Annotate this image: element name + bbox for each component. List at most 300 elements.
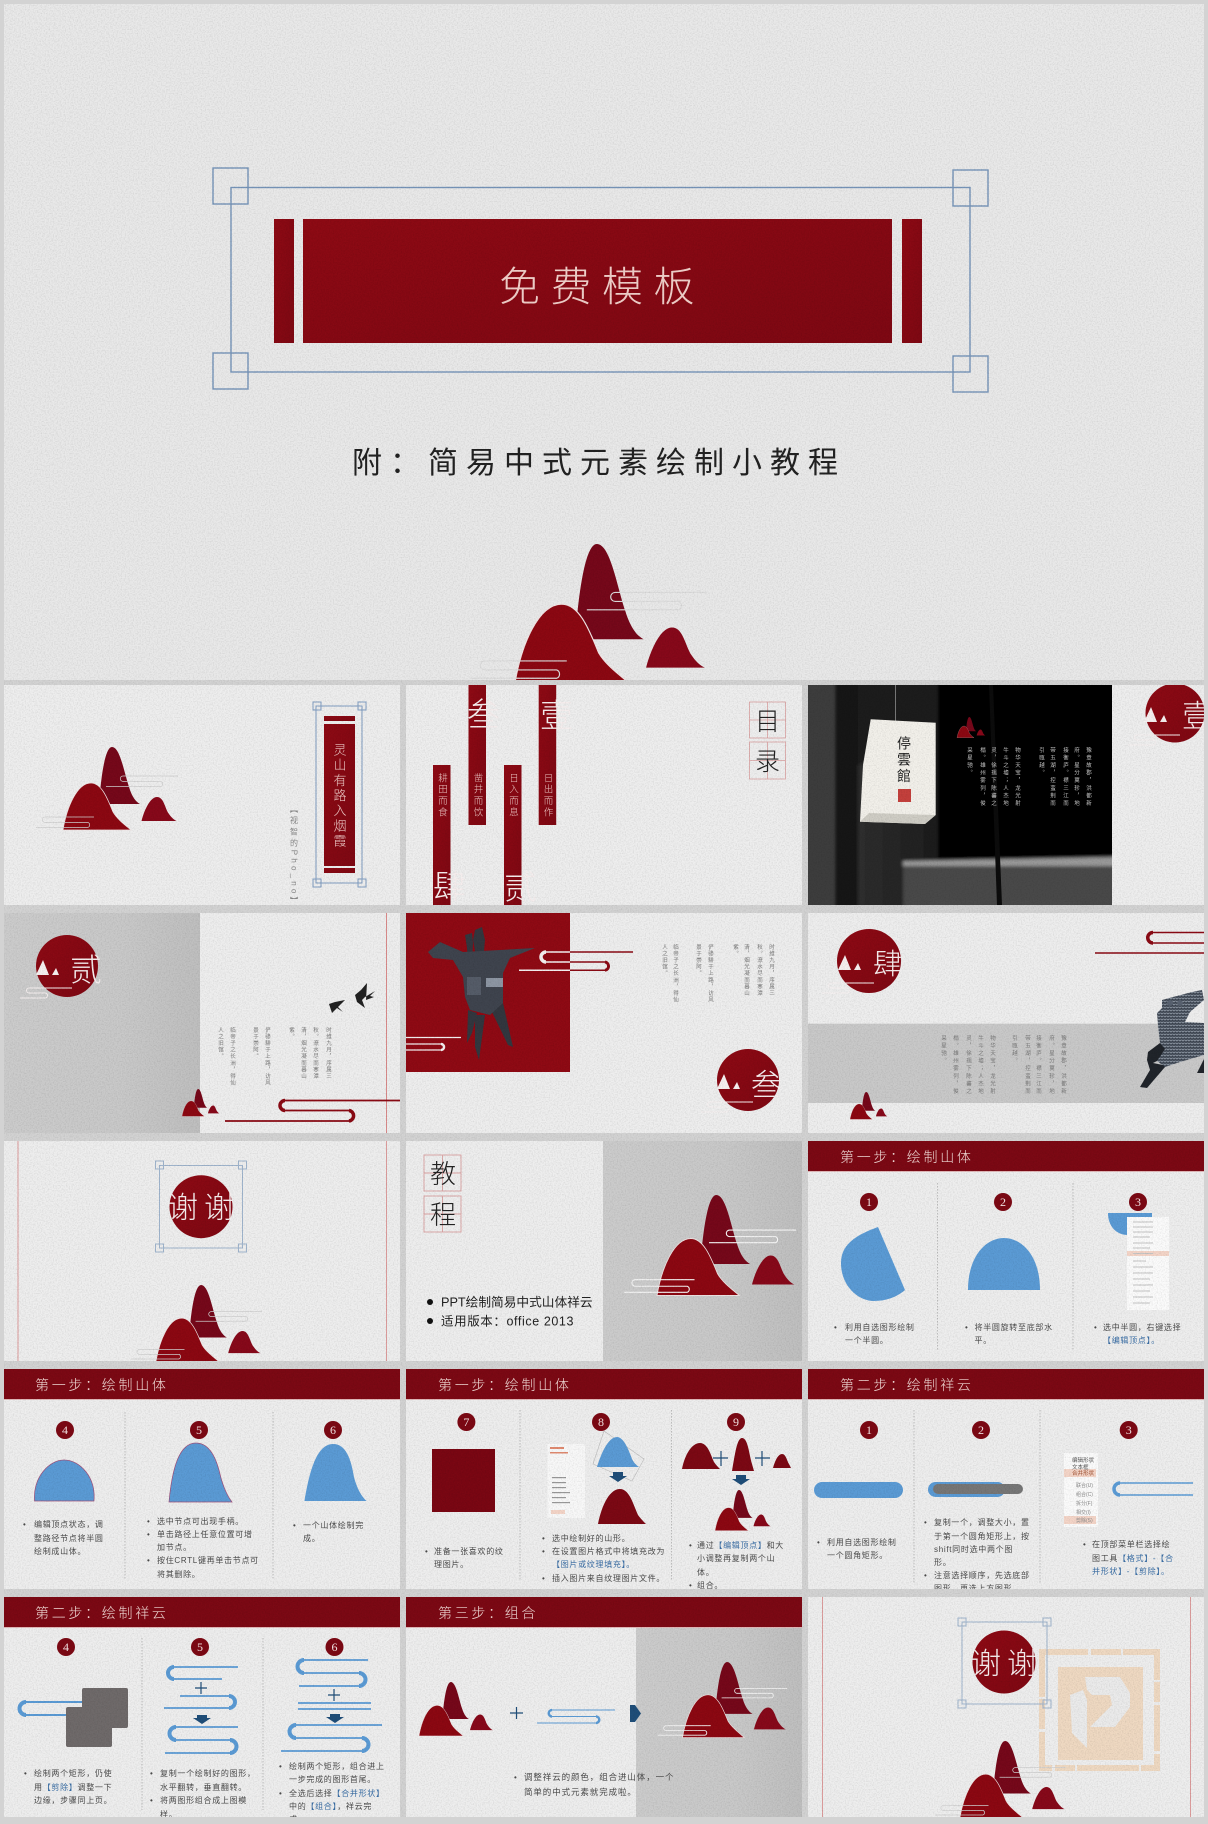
frame: [958, 1618, 1051, 1708]
caption 9: 小调整再复制两个山: [697, 1553, 775, 1563]
number 1: [860, 1421, 878, 1439]
vertical text: 带五湖，控蛮荆而: [1049, 747, 1056, 808]
caption 1: 利用自选图形绘制: [827, 1537, 897, 1547]
caption 5: 将其删除。: [157, 1569, 200, 1579]
caption 3: •: [1094, 1323, 1098, 1332]
vertical text: 时维九月，序属三: [325, 1026, 332, 1080]
heading: 教程: 程: [430, 1200, 456, 1230]
column: 贰: [504, 765, 537, 906]
vertical text: 榻。雄州雾列，俊: [952, 1034, 959, 1096]
caption 1: 利用自选图形绘制: [845, 1322, 915, 1332]
caption 3: 并形状】-【剪除】。: [1092, 1566, 1170, 1576]
mountain pieces: [682, 1438, 791, 1471]
caption 5: •: [150, 1769, 154, 1778]
number 4: [56, 1421, 74, 1439]
column: 贰: 日入而息: [507, 773, 519, 818]
caption 2: •: [924, 1571, 928, 1580]
watermark seal: [1042, 1652, 1157, 1768]
caption 6: 成。: [303, 1533, 320, 1543]
caption 9: [689, 1540, 784, 1590]
number 3: 3: [1135, 1195, 1141, 1209]
caption 8: 选中绘制好的山形。: [552, 1533, 630, 1543]
blue mountain in rotate frame: [593, 1431, 644, 1481]
number 1: 1: [866, 1423, 872, 1437]
caption 5: •: [150, 1796, 154, 1805]
dividers: [938, 1183, 1073, 1350]
grey band: [808, 1024, 1204, 1103]
caption 5: •: [147, 1517, 151, 1526]
shape: finished mountain: [304, 1444, 367, 1501]
caption 1: 一个半圆。: [845, 1335, 888, 1345]
caption 2: 于第一个圆角矩形上，按: [934, 1531, 1030, 1541]
kylin statue: [1140, 990, 1204, 1088]
caption 2: [965, 1322, 1053, 1345]
vertical text: 府。星分翼轸，地: [1048, 1034, 1055, 1096]
red panel: [406, 913, 570, 1072]
vertical text: [217, 1026, 332, 1087]
slide: tutorial intro: [406, 1141, 802, 1361]
caption 1: [834, 1322, 915, 1345]
caption 2: 复制一个，调整大小，置: [934, 1517, 1030, 1527]
header bar: 第二步：绘制祥云: [35, 1605, 169, 1621]
number 2: 2: [1000, 1195, 1006, 1209]
caption 5: 加节点。: [157, 1542, 192, 1552]
column: 叁: 叁: [467, 696, 500, 733]
slide: step one, 7-9: [406, 1369, 802, 1590]
heading: 目录: [750, 702, 786, 779]
caption 9: 组合。: [697, 1580, 723, 1590]
bullet list: 适用版本：office 2013: [441, 1314, 574, 1328]
vertical text: 引瓯越。: [1038, 746, 1045, 777]
caption 4: 用【剪除】调整一下: [34, 1782, 112, 1792]
blue crescent: [1114, 1483, 1193, 1495]
vertical text: 豫章故郡，洪都新: [1085, 746, 1092, 808]
caption 2: 形。: [934, 1558, 951, 1567]
caption 6: •: [279, 1789, 283, 1798]
caption 4: •: [23, 1520, 27, 1529]
number 6: 6: [330, 1423, 336, 1437]
scroll red bars: [324, 716, 355, 873]
number 5: [191, 1638, 209, 1656]
caption 6: 成。: [289, 1814, 306, 1824]
photo: [808, 685, 1112, 905]
vertical text: 府。星分翼轸，地: [1073, 746, 1080, 808]
number 2: 2: [978, 1423, 984, 1437]
cloud: upper: [519, 952, 633, 970]
number 4: 4: [62, 1423, 68, 1437]
small red mountain: [957, 717, 985, 738]
caption 3: [1094, 1322, 1181, 1345]
plus: [510, 1707, 523, 1719]
caption 9: •: [689, 1581, 693, 1590]
title banner: [274, 219, 922, 343]
mountain illustration: [36, 747, 178, 830]
mountain illustration: [470, 544, 707, 683]
caption 8: 在设置图片格式中将填充改为: [552, 1546, 665, 1556]
caption 2: •: [965, 1323, 969, 1332]
column: 贰: 贰: [504, 869, 537, 906]
red textured mountain: [598, 1489, 646, 1524]
texture square: [432, 1449, 495, 1512]
header bar: [406, 1597, 802, 1628]
scroll text: 灵山有路入烟霞: [332, 743, 346, 849]
lantern: [860, 719, 936, 824]
heading: 目录: 录: [755, 748, 780, 776]
caption: [514, 1772, 674, 1797]
caption 1: •: [834, 1323, 838, 1332]
caption 9: 体。: [697, 1567, 714, 1577]
header bar: [808, 1369, 1204, 1400]
number 5: 5: [196, 1423, 202, 1437]
side note: 【视智的Pho_no】: [290, 805, 298, 908]
number 2: [994, 1193, 1012, 1211]
bullet list: [427, 1296, 593, 1328]
vertical text: 秋。潦水尽而寒潭: [312, 1026, 319, 1080]
heading: 教程: [424, 1155, 461, 1232]
merge shape menu: 合并形状: [1072, 1469, 1095, 1477]
header bar: [4, 1369, 400, 1400]
combined mountain: [715, 1490, 771, 1531]
shape: editing nodes: [34, 1460, 94, 1501]
number 3: 3: [1126, 1423, 1132, 1437]
number 9: [727, 1413, 745, 1431]
header bar: 第二步：绘制祥云: [840, 1377, 974, 1393]
vertical text: 接衡庐。襟三江而: [1035, 1034, 1042, 1096]
caption 8: •: [542, 1574, 546, 1583]
dividers: [520, 1410, 672, 1581]
caption 4: •: [24, 1769, 28, 1778]
vertical text: 时维九月，序属三: [768, 943, 775, 997]
caption 4: 绘制两个矩形，仍使: [34, 1768, 112, 1778]
header bar: [406, 1369, 802, 1400]
section badge: [701, 1049, 782, 1112]
merge shape menu: [1064, 1453, 1098, 1527]
vertical text: 物华天宝，龙光射: [1014, 746, 1021, 808]
shape: half circle: [968, 1238, 1040, 1290]
vertical text: 豫章故郡，洪都新: [1060, 1034, 1067, 1096]
side lines: [822, 1597, 1191, 1817]
mountain illustration: [624, 1195, 796, 1295]
caption 7: 准备一张喜欢的纹: [434, 1546, 504, 1556]
dividers: [125, 1412, 273, 1580]
number 4: 4: [63, 1640, 69, 1654]
caption 6: •: [279, 1762, 283, 1771]
number 3: [1120, 1421, 1138, 1439]
divider line: [386, 913, 387, 1133]
vertical text: [966, 746, 1092, 808]
vertical text: [661, 943, 775, 1004]
caption 5: 选中节点可出现手柄。: [157, 1516, 244, 1526]
section badge: 肆: [873, 948, 902, 981]
number 9: 9: [733, 1415, 739, 1429]
caption 4: 编辑顶点状态，调: [34, 1519, 104, 1529]
shape: tilted half circle: [841, 1227, 905, 1301]
slide: step one, 4-6: [4, 1369, 400, 1589]
cloud pieces column 5: [164, 1667, 238, 1753]
number 7: 7: [463, 1415, 469, 1429]
number 1: [860, 1193, 878, 1211]
number 8: 8: [598, 1415, 604, 1429]
dividers: [142, 1638, 263, 1810]
caption 6: 全选后选择【合并形状】: [289, 1788, 385, 1798]
caption 8: 插入图片来自纹理图片文件。: [552, 1573, 665, 1583]
slide: section four with kylin: [808, 913, 1204, 1133]
circle with text: 谢谢: [168, 1192, 240, 1225]
number 5: [190, 1421, 208, 1439]
small mountain: [182, 1089, 219, 1116]
merge shape menu: 组合(C): [1076, 1491, 1093, 1498]
vertical text: 牛斗之墟；人杰地: [1002, 746, 1009, 808]
section badge: [822, 929, 902, 993]
mountain illustration: [131, 1285, 262, 1361]
settings dialog: [548, 1444, 585, 1518]
vertical text: 临帝子之长洲，得仙: [229, 1026, 236, 1087]
caption 6: •: [293, 1521, 297, 1530]
header bar: 第三步：组合: [438, 1605, 538, 1621]
number 7: [457, 1413, 475, 1431]
rounded bar: [814, 1482, 903, 1498]
number 1: 1: [866, 1195, 872, 1209]
caption 6: 一步完成的图形首尾。: [289, 1774, 376, 1784]
mountain illustration: [935, 1741, 1066, 1817]
slide: section two: [20, 913, 400, 1133]
vertical text: 俨骖騑于上路，访风: [707, 943, 714, 1004]
column: 壹: 日出而作: [542, 773, 553, 818]
vertical text: 临帝子之长洲，得仙: [672, 943, 679, 1004]
vertical text: 采星驰。: [966, 746, 973, 777]
grey panel: [636, 1627, 802, 1817]
grey panel: [603, 1141, 802, 1361]
column: 肆: 肆: [433, 868, 466, 905]
caption 2: •: [924, 1518, 928, 1527]
caption 4: 边缘，步骤同上页。: [34, 1795, 112, 1805]
caption 2: shift同时选中两个图: [934, 1544, 1013, 1554]
arrow: [732, 1475, 750, 1485]
caption 6: 一个山体绘制完: [303, 1520, 364, 1530]
slide: section one with lantern photo: [808, 685, 1208, 905]
shape: half circle with context menu: [1108, 1213, 1169, 1310]
circle with text: 谢谢: [971, 1648, 1043, 1681]
caption 4: [23, 1519, 104, 1556]
caption 1: 一个圆角矩形。: [827, 1550, 888, 1560]
column: 肆: 耕田而食: [436, 772, 448, 818]
title: 免费模板: [499, 264, 705, 310]
caption 4: 绘制成山体。: [34, 1546, 86, 1556]
vertical text: 牛斗之墟；人杰地: [977, 1034, 984, 1096]
caption 9: 通过【编辑顶点】和大: [697, 1540, 784, 1550]
vertical text: 人之旧馆。: [661, 944, 668, 977]
small mountain: [850, 1092, 887, 1119]
blue ornamental frame: [213, 168, 988, 392]
vertical text: 接衡庐。襟三江而: [1062, 746, 1069, 808]
circle with text: [168, 1175, 240, 1238]
merge shape menu: 文本框: [1072, 1463, 1089, 1471]
plus signs: [713, 1451, 770, 1466]
scroll frame: [313, 702, 366, 887]
number 3: [1129, 1193, 1147, 1211]
caption 1: [817, 1537, 897, 1560]
vertical text: 榻。雄州雾列，俊: [979, 746, 986, 808]
blue cloud: [537, 1710, 615, 1723]
shape: handle editing: [169, 1443, 232, 1502]
slide: step one, 1-3: [808, 1141, 1204, 1361]
number 4: [57, 1638, 75, 1656]
slide: thanks: [4, 1141, 400, 1361]
caption 5: •: [147, 1556, 151, 1565]
merge shape menu: 联合(U): [1076, 1482, 1093, 1489]
vertical text: 俨骖騑于上路，访风: [264, 1026, 271, 1087]
slide: step two, 1-3: [808, 1369, 1204, 1593]
circle with text: [971, 1630, 1043, 1694]
caption 5: 按住CRTL键再单击节点可: [157, 1555, 259, 1565]
number 6: 6: [332, 1640, 338, 1654]
plus and arrow column 6: [326, 1689, 344, 1723]
caption 3: •: [1083, 1540, 1087, 1549]
vertical text: 景于崇阿。: [252, 1027, 259, 1060]
arrow: [609, 1472, 627, 1482]
merge shape menu: 编辑形状: [1072, 1456, 1095, 1464]
caption 7: 理图片。: [434, 1559, 469, 1569]
caption 2: 平。: [974, 1336, 992, 1345]
section badge: [20, 935, 102, 998]
heading: 教程: 教: [430, 1159, 456, 1189]
slide: thanks with watermark seal: [808, 1597, 1204, 1817]
caption 8: 【图片或纹理填充】。: [552, 1559, 635, 1569]
caption 8: •: [542, 1534, 546, 1543]
caption 8: [542, 1533, 665, 1583]
caption 5: 将两图形组合成上图模: [160, 1795, 247, 1805]
section badge: [1128, 684, 1208, 745]
caption 5: 样。: [160, 1809, 177, 1819]
subtitle: 附：简易中式元素绘制小教程: [352, 447, 846, 480]
header bar: 第一步：绘制山体: [35, 1377, 169, 1393]
caption 4: [24, 1768, 112, 1805]
mountain pieces: [419, 1682, 493, 1736]
caption 5: [147, 1516, 259, 1579]
vertical text: [940, 1034, 1067, 1096]
caption 3: 在顶部菜单栏选择绘: [1092, 1539, 1170, 1549]
vertical text: 物华天宝，龙光射: [989, 1034, 996, 1096]
frame: [156, 1161, 246, 1252]
bullet list: PPT绘制简易中式山体祥云: [441, 1296, 593, 1310]
number 5: 5: [197, 1640, 203, 1654]
caption 6: 绘制两个矩形，组合进上: [289, 1761, 385, 1771]
caption 8: •: [542, 1547, 546, 1556]
header bar: [808, 1141, 1204, 1172]
caption: •: [514, 1773, 518, 1782]
header bar: 第一步：绘制山体: [840, 1149, 974, 1165]
caption: 调整祥云的颜色，组合进山体，一个: [524, 1772, 674, 1782]
caption 3: [1083, 1539, 1174, 1576]
vertical text: 带五湖，控蛮荆而: [1024, 1035, 1031, 1096]
vertical text: 引瓯越。: [1011, 1034, 1018, 1065]
column: 叁: 凿井而饮: [472, 773, 483, 818]
dividers: [914, 1410, 1040, 1583]
caption 3: 图工具【格式】-【合: [1092, 1553, 1174, 1563]
caption 5: 复制一个绘制好的图形，: [160, 1768, 256, 1778]
column: 叁: [467, 685, 500, 825]
cloud cut with grey rects: [20, 1688, 128, 1747]
caption 9: •: [689, 1541, 693, 1550]
caption 5: 水平翻转，垂直翻转。: [160, 1782, 247, 1792]
cloud: lower: [406, 1038, 461, 1050]
caption 2: 图形，再选上方图形。: [934, 1583, 1021, 1593]
slide: title scroll with mountain: [4, 685, 400, 908]
side lines: [18, 1141, 387, 1361]
header bar: [4, 1597, 400, 1628]
red cloud: [1095, 932, 1204, 953]
caption 7: [425, 1546, 504, 1569]
column: 肆: [433, 765, 466, 905]
section badge: 叁: [751, 1068, 782, 1103]
slide: cover: [4, 4, 1204, 680]
caption 2: 将半圆旋转至底部水: [974, 1322, 1053, 1332]
red cloud: [225, 1100, 400, 1121]
vertical text: 紫。: [288, 1027, 295, 1040]
column: 壹: [539, 685, 573, 825]
caption 3: 【编辑顶点】。: [1103, 1335, 1160, 1345]
arrow: [630, 1705, 641, 1722]
vertical text: 清，烟光凝而暮山: [743, 943, 750, 997]
number 2: [972, 1421, 990, 1439]
vertical text: 景于崇阿。: [695, 944, 702, 977]
caption: 简单的中式元素就完成啦。: [524, 1787, 637, 1797]
vertical text: 采星驰。: [940, 1034, 947, 1065]
caption 6: [293, 1520, 364, 1543]
plus and arrow column 5: [193, 1682, 211, 1724]
caption 6: 中的【组合】，祥云完: [289, 1801, 372, 1811]
caption 2: 注意选择顺序，先选底部: [934, 1570, 1030, 1580]
header bar: 第一步：绘制山体: [438, 1377, 572, 1393]
vertical text: 人之旧馆。: [217, 1027, 224, 1060]
column: 壹: 壹: [540, 697, 573, 734]
caption 1: •: [817, 1538, 821, 1547]
bronze vessel: [428, 927, 535, 1060]
lantern: 停雲館: [896, 735, 912, 785]
overlapped bars: [928, 1482, 1023, 1497]
vertical text: 秋。潦水尽而寒潭: [756, 943, 763, 997]
merge shape menu: 相交(I): [1076, 1509, 1091, 1516]
merge shape menu: 拆分(F): [1076, 1500, 1093, 1507]
caption 5: 单击路径上任意位置可增: [157, 1529, 253, 1539]
swallows: [329, 983, 375, 1013]
vertical text: 灵，徐孺下陈蕃之: [965, 1035, 972, 1096]
vertical text: 灵，徐孺下陈蕃之: [990, 747, 997, 808]
merge shape menu: 剪除(S): [1076, 1517, 1093, 1524]
number 6: [326, 1638, 344, 1656]
finished mountain: [658, 1662, 787, 1738]
number 6: [324, 1421, 342, 1439]
caption 6: [279, 1761, 385, 1824]
slide: step three: [406, 1597, 802, 1817]
section badge: 贰: [70, 952, 102, 988]
caption 4: 整路径节点将半圆: [34, 1533, 104, 1543]
vertical text: 清，烟光凝而暮山: [300, 1026, 307, 1080]
caption 5: [150, 1768, 256, 1819]
number 8: [592, 1413, 610, 1431]
caption 5: •: [147, 1530, 151, 1539]
vertical text: 紫。: [732, 944, 739, 957]
grey panel: [4, 913, 200, 1133]
caption 7: •: [425, 1547, 429, 1556]
heading: 目录: 目: [755, 708, 780, 736]
caption 2: [924, 1517, 1030, 1593]
slide: step two, 4-6: [4, 1597, 400, 1824]
slide: contents: [406, 685, 802, 906]
cloud pieces column 6: [281, 1660, 382, 1751]
slide: section three with bronze vessel: [406, 913, 802, 1133]
caption 3: 选中半圆，右键选择: [1103, 1322, 1181, 1332]
